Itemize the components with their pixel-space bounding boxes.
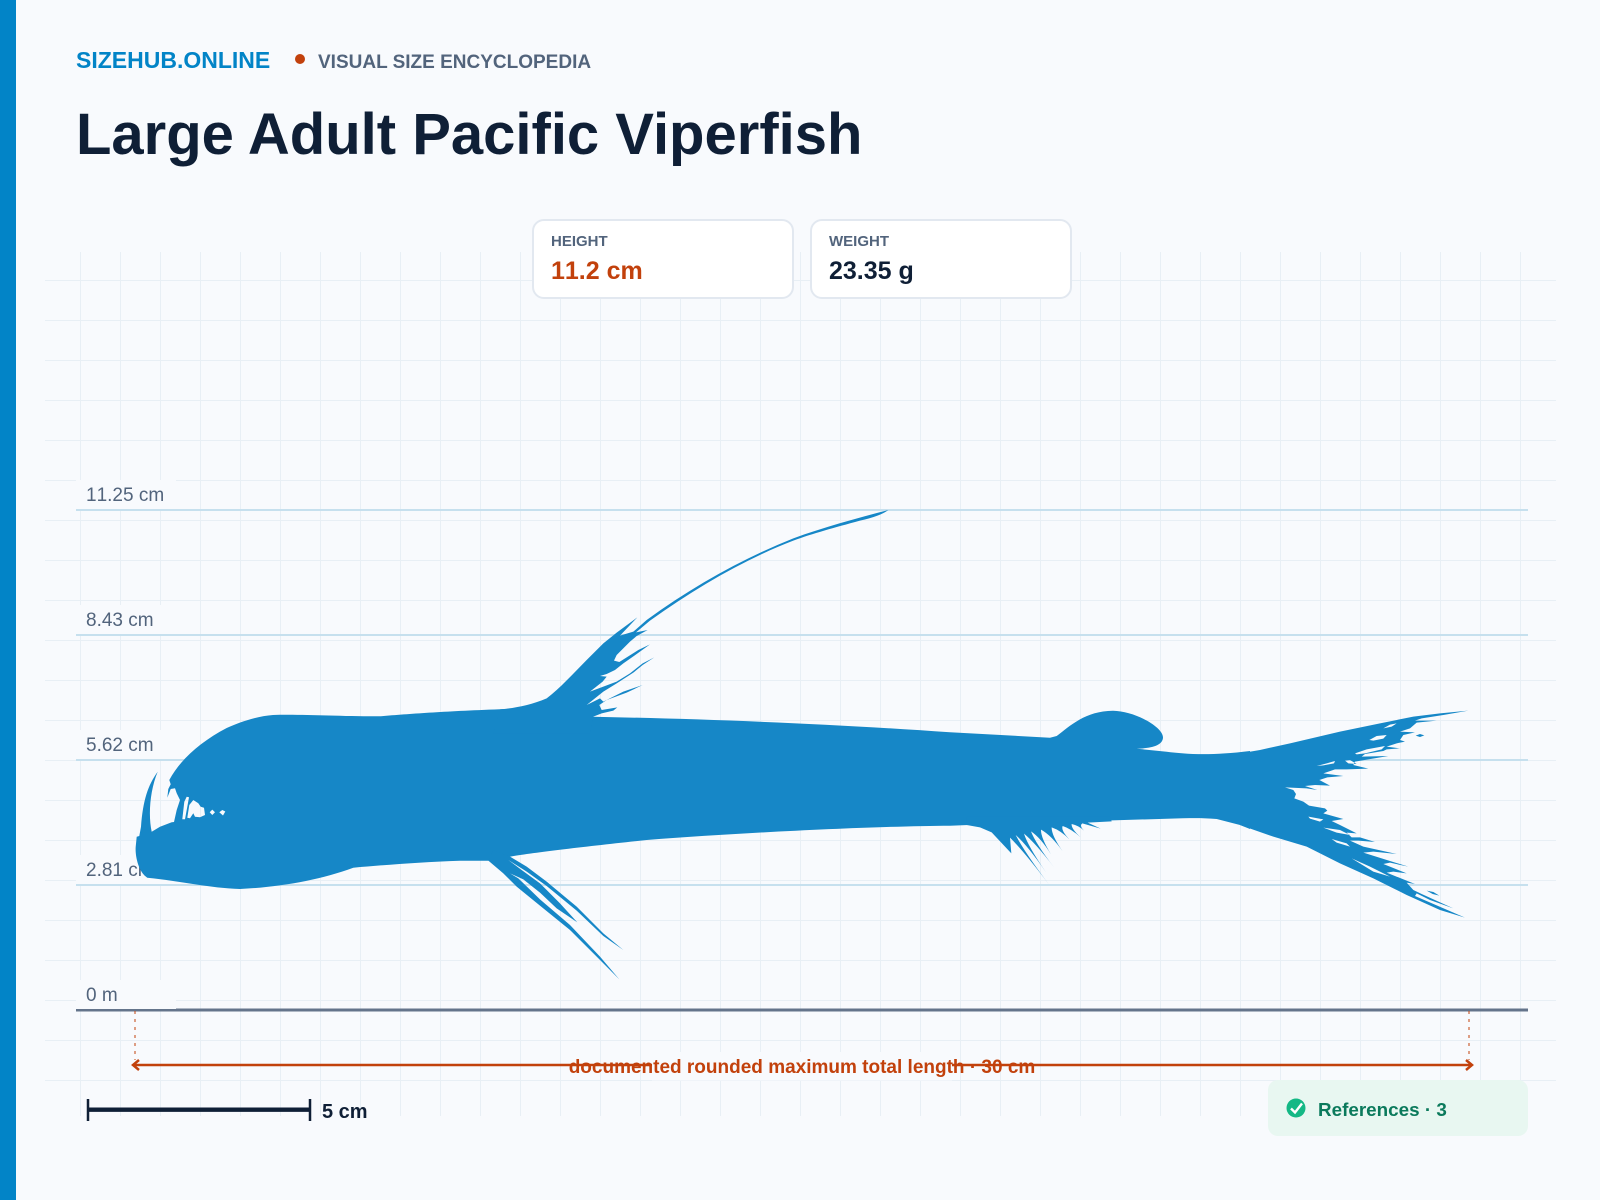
axis labels: 5.62 cm <box>86 735 154 756</box>
axis labels: 0 m <box>86 985 118 1006</box>
references badge: References · 3 <box>1318 1099 1447 1120</box>
axis labels: 2.81 cm <box>86 860 154 881</box>
stat card: height: 11.2 cm <box>551 257 643 285</box>
axis labels: 11.25 cm <box>86 485 164 506</box>
brand name: SIZEHUB.ONLINE <box>76 47 270 73</box>
viperfish silhouette <box>136 510 1468 979</box>
fish body and head <box>136 703 1250 889</box>
pectoral fin <box>488 850 623 979</box>
separator dot <box>295 54 305 64</box>
icon: check <box>1286 1098 1306 1118</box>
scale reference lines <box>76 509 1528 1012</box>
length label: documented rounded maximum total length · 30 cm <box>569 1057 1035 1078</box>
scale bar: 5 cm <box>322 1101 368 1123</box>
stat card: weight: WEIGHT <box>829 233 889 250</box>
left accent bar <box>0 0 16 1200</box>
title: Large Adult Pacific Viperfish <box>76 102 862 167</box>
header <box>76 47 591 73</box>
references badge <box>1268 1080 1528 1136</box>
stat card: height <box>533 220 793 298</box>
length measurement arrow <box>133 1011 1472 1080</box>
axis labels: 8.43 cm <box>86 610 154 631</box>
scale bar <box>88 1099 368 1123</box>
stat card: weight: 23.35 g <box>829 257 914 285</box>
axis labels <box>76 480 176 1009</box>
tagline: VISUAL SIZE ENCYCLOPEDIA <box>318 52 591 73</box>
stat card: weight <box>811 220 1071 298</box>
dotted extension lines <box>135 1011 1469 1060</box>
stat card: height: HEIGHT <box>551 233 608 250</box>
caudal fin <box>1240 711 1468 918</box>
dorsal fin and lure ray <box>493 510 888 733</box>
anal fin <box>967 817 1112 885</box>
